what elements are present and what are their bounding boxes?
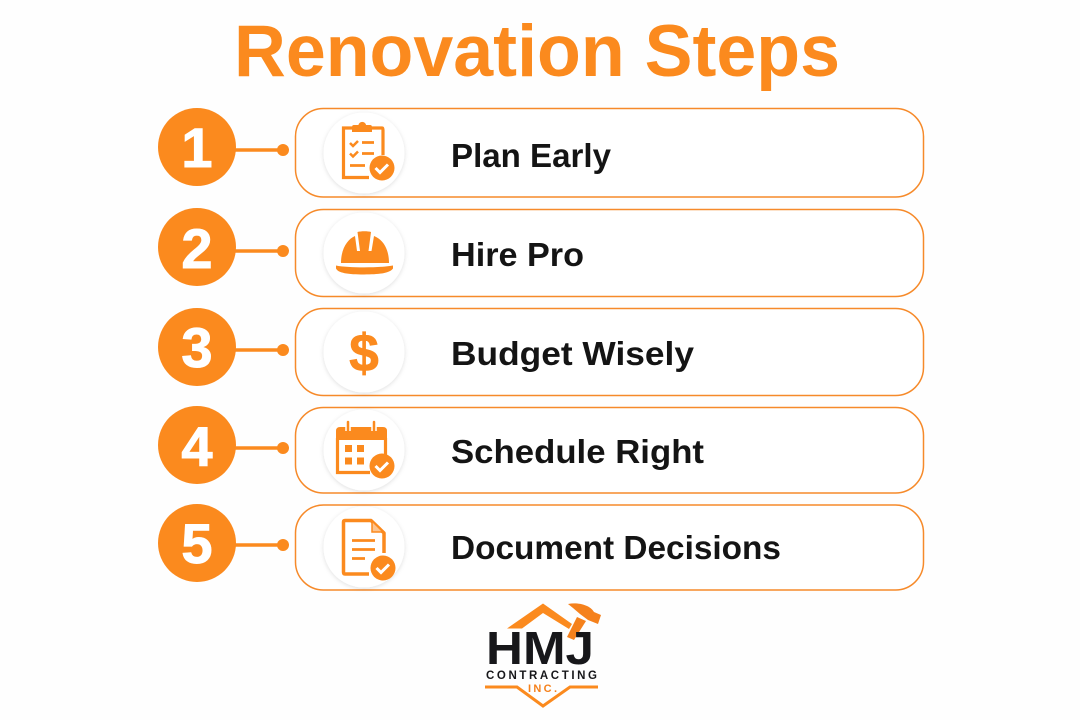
- logo wordmark HMJ: HMJ: [486, 622, 594, 674]
- icon: calendar with check: [324, 410, 404, 490]
- panel: step 5: [296, 505, 924, 590]
- logo text CONTRACTING: CONTRACTING: [486, 670, 597, 682]
- label: Document Decisions: Document Decisions: [451, 529, 781, 566]
- label: Hire Pro: Hire Pro: [451, 236, 584, 273]
- step 4: Schedule Right: [158, 406, 924, 493]
- panel: step 1: [296, 108, 924, 197]
- number badge 5: [158, 504, 236, 582]
- icon: hard hat: [324, 212, 404, 294]
- number badge 2: 2: [181, 217, 213, 280]
- step 1: Plan Early: [158, 108, 924, 197]
- label: Budget Wisely: Budget Wisely: [451, 335, 695, 372]
- step 2: Hire Pro: [158, 208, 924, 296]
- label: Plan Early: Plan Early: [451, 137, 612, 174]
- panel: step 2: [296, 210, 924, 296]
- number badge 4: 4: [181, 415, 213, 478]
- number badge 3: 3: [181, 316, 213, 379]
- number badge 5: 5: [181, 512, 213, 575]
- icon: document with check: [324, 506, 404, 588]
- icon: dollar sign: $: [349, 324, 379, 383]
- logo base chevron: [485, 687, 598, 706]
- number badge 4: [158, 406, 236, 484]
- title: Renovation Steps: [234, 11, 840, 92]
- logo: HMJ Contracting Inc.: [485, 603, 601, 706]
- connector: step 4: [232, 442, 289, 454]
- label: Schedule Right: Schedule Right: [451, 433, 704, 470]
- icon: clipboard with check: [324, 112, 404, 194]
- logo roof: [507, 604, 572, 629]
- connector: step 5: [232, 539, 289, 551]
- panel: step 4: [296, 408, 924, 493]
- number badge 1: [158, 108, 236, 186]
- number badge 3: [158, 308, 236, 386]
- panel: step 3: [296, 308, 924, 396]
- step 5: Document Decisions: [158, 504, 924, 590]
- number badge 1: 1: [181, 116, 213, 179]
- step 3: Budget Wisely: [158, 308, 924, 396]
- number badge 2: [158, 208, 236, 286]
- connector: step 1: [232, 144, 289, 156]
- logo text INC.: INC.: [528, 683, 557, 695]
- connector: step 2: [232, 245, 289, 257]
- logo hammer: [567, 603, 601, 640]
- connector: step 3: [232, 344, 289, 356]
- icon: dollar sign: [324, 312, 404, 392]
